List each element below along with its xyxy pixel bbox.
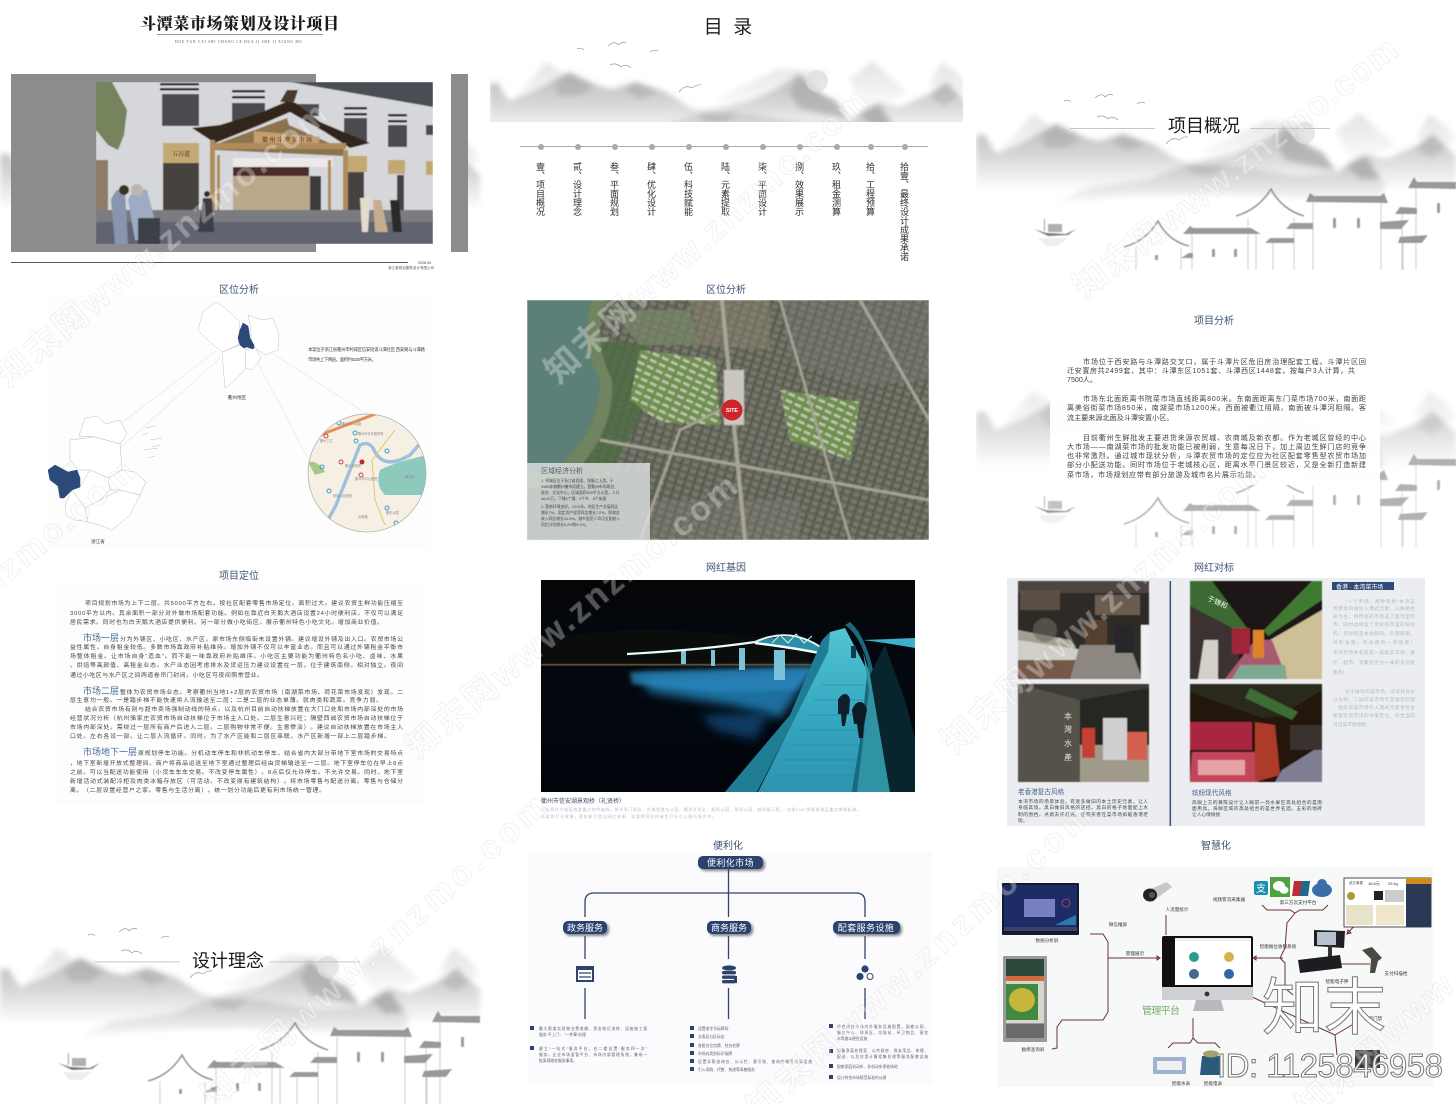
heading: 网红基因 [706,561,746,574]
positioning text: 市场地下一层 [83,746,137,757]
list: supporting facilities [829,1024,928,1080]
benchmark side text: 厅、超市、邻聚社区为一体的多功能 [1333,659,1415,666]
positioning text: ，地下室新增开放式整理间。商户将商品运送至地下室通过整理后经由货梯输送至一二层。地下室停车位在早上8点 [70,759,403,767]
device: electronic scale [1260,930,1349,985]
benchmark side text: 以为荣。二层的菜市场不宜做老旧但 [1333,696,1415,703]
positioning text: 益性属性。自身租金较低。多数市场靠政府补贴维持。增加外铺不仅可以丰富业态。而且可以通过外铺租金平衡市 [70,643,403,651]
benchmark side text: 的。见绿的卖本地蔬和。外国蔬果。 [1333,630,1415,637]
captions left: 街。 [1018,817,1027,824]
night bridge photo [541,580,915,792]
positioning text [70,599,403,794]
positioning text: 分为外铺区、小吃区、水产区。原市场东侧临街未设置外铺。建议增设外铺及出入口。农贸市场公 [120,635,403,643]
photo: hong kong market entrance: 本 [1064,711,1072,721]
icon: database [722,965,737,983]
photo: colorful butcher stall [1190,684,1322,782]
node: government services: 政务服务 [567,922,603,933]
positioning text: 经营状况分析（杭州骆家庄农贸市场自动扶梯位于市场主入口处。二层生意兴旺；隔壁西诚农贸市场自动扶梯位于 [70,714,403,722]
cover title: 斗潭菜市场策划及设计项目 [140,14,339,33]
cover footer: 浙江某规划建筑设计有限公司 [388,265,434,270]
network label and monitor: 管理展示 [1126,950,1145,957]
analysis text: 也非常激烈。通过城市现状分析，斗潭农贸市场的定位应为社区配套零售型农贸市场加 [1067,451,1366,460]
certificates and stall info screen: 武江单菜 [1349,880,1364,885]
benchmark side text: 本湾市场并非就是一座集菜市场、餐 [1333,649,1415,656]
satellite image [527,300,929,540]
city map circle: 衢州三江 [320,438,334,443]
toc items: 捌、效果展示 [794,161,804,216]
positioning text: 新增活动式装配冷柜及肉类冰箱存放区（可活动。不改变原有建筑结构）。将市场零售与配送分离。零售与仓储分 [70,777,403,785]
ink mountains [490,42,963,122]
analysis text: 大市场——南湖菜市场的批发功能已被削弱，生意每况日下，加上周边生鲜门店的竞争 [1067,442,1366,451]
network label and monitor: 微信推屏 [1109,921,1128,928]
analysis text: 部分小配送功能。同时市场位于老城核心区，距离水亭门景区较近，又是全新打造新建 [1067,460,1366,469]
list: government services: 服务“不上门”、“一件事”办理 [539,1032,586,1037]
heading: 项目定位 [219,569,259,582]
positioning text: 场整体租金。让市场自身“造血”。而不能一味靠政府补贴维序。小吃区主要功能为衢州特色名小吃、卤味、水果 [70,652,403,660]
photo: hong kong market entrance: 產 [1064,752,1072,762]
icon: settings panel [576,966,594,982]
project analysis panel [976,314,1456,547]
icon: hexagons [856,965,873,980]
city map circle: 衢江区 [405,474,415,479]
connector lines [1052,905,1370,1055]
Quzhou label: 衢州地区 [228,394,247,401]
table of contents slide [489,17,969,262]
device: barcode scanner: 支付扫描枪 [1385,970,1408,977]
positioning text: 市场二层 [83,685,119,696]
toc items: 柒、平面设计 [757,161,767,217]
rendering of market entrance: 五谷道 [172,150,190,158]
payment platform logos [1213,877,1332,906]
city map circle: 大桥路 [358,514,368,519]
photo: hong kong market entrance [1018,684,1149,782]
device: camera [1143,882,1189,913]
device: data screen: 数据分析屏 [1036,937,1059,944]
section title: 项目概况 [1168,116,1240,136]
toc title: 目 录 [704,17,752,38]
smart meters [1153,1050,1223,1087]
benchmark side text: “一个市场。两种风格”本湾菜 [1345,598,1415,605]
list: business services: 各租台位包牌、柱台宅牌 [698,1043,740,1048]
section slide: project overview [976,94,1456,270]
captions left: 风眼上方的黄陈设计让人眼前一亮水果区高处组合的是雨 [1192,799,1322,806]
regional economy overlay: 46.49万。下辖2个镇、9个乡、8个街道 [541,496,606,501]
device: data screen [1002,883,1079,944]
toc items: 拾、工程预算 [865,161,875,217]
positioning text: 结合农贸市场有别与超市卖场强制动线的特点。以及杭州目前自动扶梯放置在大门口处和市场内部深处的市场 [85,705,403,713]
list: supporting facilities: 配备净菜处理室、公共厨房、保安用品、修理、 [837,1048,928,1053]
regional economy overlay: 1. 柯城区位于浙江省西部。钱塘江上游。于 [541,478,614,483]
captions left: 身临其境。黑白做旧风格的店招。黑白的格子地面配上木 [1018,804,1148,811]
positioning text: 居民需求。同时也为白天鹅大酒店提供便利。另一部分做小吃街区。展示衢州特色小吃文化。增加商业价值。 [70,618,383,626]
toc items: 玖、租金测算 [831,161,841,217]
benchmark side badge: 香港 · 本湾菜市场 [1336,583,1383,591]
city map circle: 柯城人民医院 [333,493,353,498]
heading: 便利化 [713,839,743,852]
list: supporting facilities: 配送、以及应用计算程集处理等服务配套设施 [837,1054,928,1059]
benchmark side badge [1332,582,1394,591]
site marker [722,400,742,420]
list: business services: 设置老字号标牌间 [698,1026,729,1031]
benchmark side text: 日料食物。鸡食辣的一点随便！ [1333,639,1415,646]
cover slide [0,14,480,270]
captions left: 制的围挡。点缀去许灯光。使购买者在菜市场如临香港老 [1018,811,1148,818]
smart meters: 智能水表 [1172,1080,1191,1087]
captions left: 让人心情愉悦 [1192,811,1220,818]
list: government services: 最大限度实现物业费收缴、资金账位流转、设施施工报 [539,1026,647,1031]
tree connectors [585,868,865,1019]
city map circle: 衢州市中心医院 [355,476,378,481]
captions left: 老香港复古风格 [1018,787,1065,796]
list: supporting facilities: 设计符合市场规范标准的公厕 [837,1075,887,1080]
node: supporting facilities [833,921,900,934]
root node [698,856,763,869]
location description: 市场共上下两层。面积约5100平方米。 [308,356,376,363]
node: business services: 商务服务 [711,922,747,933]
photo caption: 衢州市信安湖景观桥（礼贤桥） [541,797,625,805]
benchmark side text: 市。同时也保留了传统的市里的喧闹 [1333,621,1415,628]
toc items: 贰、设计理念 [572,161,582,216]
benchmark side text: 对于破败的菜市场。非常抗日乐 [1345,688,1415,695]
list: government services: 服务。企业市场监管平台、市场内部管理系统。集成一 [539,1052,647,1057]
photo: hong kong market entrance: 水 [1064,738,1072,747]
cover footer [11,261,434,270]
list: business services: 引入采购、代售、快递等高善服务 [698,1067,755,1072]
photo caption: 同以桥作为城区旅游重点的中轴线。将水亭门街区、古城墙遗址公园、儒学文化区、鹿鸣公园、草坪公园、城市展示馆、“北部208”等新老城区重点串联起来。 [541,806,861,812]
photo: old Hong Kong interior [1018,581,1149,679]
list: business services: 设置导购咨询台、公示栏、意引致、查询终端等引导设施 [698,1059,812,1064]
list: supporting facilities: 综合疏控市场内外服务设施配置。配套公测、 [837,1024,928,1029]
positioning text: 通过小吃区与水产区之间两道卷帘门封闭。小吃区可夜间照常营业。 [70,671,263,679]
site marker: SITE [726,408,738,414]
satellite map panel [527,283,929,540]
list: government services: 批离规政务服务事项。 [539,1058,577,1063]
list: supporting facilities: 服务中心、休息区、垃圾站、环卫物品、直饮 [837,1030,928,1035]
diagonal site watermarks: 知末网www.znzmo.com [538,82,875,391]
internet-famous benchmark panel [1007,561,1425,826]
regional economy overlay: 2. 营商环境良好。2019年。地区生产总值同比 [541,504,618,509]
regional economy overlay: 经济、文化中心。区域面积609平方公里。人口 [541,490,620,495]
rendering of market entrance [96,82,433,244]
analysis text: 市场东北面距离书院菜市场直线距离800米。东南面距离东门菜市场700米，南面距 [1083,394,1366,403]
heading: 区位分析 [219,283,259,296]
positioning text: 原规划停车功能。分机动车停车和非机动车停车。结合省内大部分带地下室市场的交易特点 [138,749,403,757]
network label and monitor [1109,921,1383,1068]
location description: 本案位于浙江省衢州市柯城区信安街道斗潭社区 西安路与斗潭路 [308,346,426,353]
regional economy overlay: 收入同比增长34.9%。城乡居民人均可支配收入 [541,516,620,521]
management platform computer [1142,936,1253,1017]
heading: 项目分析 [1194,314,1234,327]
device: electronic scale: 智能摊位收银系统 [1260,943,1297,950]
positioning text: 离。（二层设置经营户之家。零售与生活分离）。统一划分功能后更有利市场统一管理。 [70,786,325,794]
analysis text: 目前衢州生鲜批发主要进货来源农贸城、农商城及新农都。作为老城区曾经的中心 [1083,433,1366,442]
positioning text: 3000平方以内。其余面积一部分对外做市场配套功能。例如在靠近白天鹅大酒店设置24小时便利店。不仅可以满足 [70,609,403,617]
benchmark side text: 彩为主。将传统的市场成了超市型的 [1333,613,1415,620]
positioning text: 层生意均一般。一是踏步梯不能快速将人流输送至二层；二是二层的业态单薄。就肉类和蔬菜。竞争力弱。 [70,696,382,704]
city map circle: 衢州市政府 [345,463,362,468]
captions left: 面用具。海鲜区域的高处组合的是世界名酒。五彩的地砖 [1192,805,1322,812]
benchmark side text: 集市！ [1333,669,1347,676]
list: government services: 建立“一站式”服务平台。在二楼设置“服务四一次” [539,1046,648,1051]
benchmark side text: 场整体风格加入港式元素。以鲜艳色 [1333,605,1415,612]
convenience panel [527,839,932,1085]
list: government services [530,1026,648,1063]
divider [1170,581,1171,826]
analysis text: 离美俗街菜市场850米，南湖菜市场1200米。西面被衢江阻隔，南面被斗潭河阻隔。客 [1067,403,1366,412]
smart management panel [997,839,1433,1087]
analysis text: 7500人。 [1067,376,1097,384]
photo: modern market aisle: 于锦和 [1206,594,1229,611]
rendering of market entrance: 衢州斗潭菜市场 [262,136,312,144]
regional economy overlay: 区域经济分析 [541,466,583,475]
cover title underline and pinyin: DOU TAN CAI SHI CHANG CE HUA JI SHE JI XIANG MU [175,40,302,44]
list: business services: 文表区分区标志 [698,1034,725,1039]
positioning text: 市场一层 [83,632,119,643]
network label and monitor: 智能门禁 [1364,1015,1383,1022]
brand watermark: 知末 [1262,974,1386,1043]
analysis text: 市场位于西安路与斗潭路交叉口，属于斗潭片区危旧房治理配套工程。斗潭片区回 [1083,357,1366,366]
city map circle: 衢州市人民路 [342,421,362,426]
internet-famous gene panel [541,561,915,819]
toc items: 陆、元素提取 [720,161,730,217]
payment platform logos: 第三方云支付平台 [1280,899,1317,906]
toc items: 肆、优化设计 [646,161,656,217]
analysis text: 迁安置房共2499套，其中：斗潭东区1051套、斗潭西区1448套，按每户3人计算，共 [1067,366,1355,375]
toc items [535,161,909,262]
toc items: 叁、平面规划 [609,161,619,216]
gray image placeholders [11,74,468,252]
heading: 网红对标 [1194,561,1234,574]
positioning text: 项目规划市场为上下二层。共5000平方左右。按社区配套零售市场定位。面积过大。建议农贸生鲜功能压缩至 [85,599,403,607]
positioning text: 市场内部深处。需绕过一层所有商户后进入二层。二层购物非常不便。生意惨淡）。建议自动扶梯放置在市场主入 [70,723,403,731]
device: touch kiosk: 触摸查询屏 [1022,1046,1045,1053]
smart meters: 智能电表 [1204,1080,1223,1087]
captions left: 本湾市场的场景体验。有逐多做旧的本土历史元素。让人 [1018,798,1148,805]
heading: 智慧化 [1201,839,1231,852]
positioning text: 之前。可以当配送功能使用（小货车车车交易。不改变停车属性）。8点后仅允许停车。不允许交易。同时。地下室 [70,768,403,776]
benchmark side text: 、拙劣的菜市场引入港式元素更符合 [1333,704,1415,711]
captions right: 缤纷现代风格 [1192,788,1232,797]
node: business services [707,921,751,934]
root node: 便利化市场 [707,857,754,868]
project positioning panel [55,569,425,805]
positioning text: 、烘焙等高颜值、高租金业态。水产业态因考虑排水及货运压力建议设置在一层。位于建筑南侧。相对独立。夜间 [70,661,403,669]
payment platform logos: 支 [1256,883,1266,895]
device: touch kiosk [1003,956,1047,1053]
Quzhou map [198,302,279,388]
node: government services [563,921,607,934]
diagonal site watermarks: 知末网www.znzmo.com [399,467,745,766]
benchmark side text [1333,598,1415,728]
list: business services [690,1026,812,1072]
timeline [520,144,928,150]
captions left [1018,787,1322,824]
regional economy overlay [527,463,650,540]
certificates and stall info screen: 25 kg [1388,881,1398,886]
toc items: 拾壹、最终设计成果承诺 [899,161,909,262]
list: business services: 市场内类别标识指牌 [698,1051,732,1056]
city map circle: 衢东公园 [386,510,399,515]
regional economy overlay: 1985年随衢州撤市而建立。是衢州市的政治、 [541,484,618,489]
connector lines [60,350,367,480]
benchmark side text: 新型农贸市场的效果定位。符合当前 [1333,712,1415,719]
location description [308,346,426,363]
city map circle [305,410,430,535]
node: supporting facilities: 配套服务设施 [838,922,894,933]
city map circle: 衢州市青年路学院 [358,431,384,436]
positioning text: 口处。左右各设一部。让二层人流循环。同时。为了水产区能和二层区串联。水产区新增一部上二层踏步梯。 [70,732,390,740]
diagonal site watermarks: 知末网www.znzmo.com [1067,30,1405,306]
positioning text: 整体为农贸市场业态。考察衢州当地1+2层的农贸市场（南湖菜市场、荷花菜市场发现）发现。二 [120,688,403,696]
list: supporting facilities: 水等基本便民设施 [837,1036,868,1041]
certificates and stall info screen [1344,878,1431,927]
cover footer: 2026.04 [418,261,431,265]
Zhejiang map [48,416,162,530]
analysis text: 流主要来源北面及斗潭安置小区。 [1067,413,1173,422]
section slide: design concept [0,928,480,1104]
photo caption: 炫彩的灯光效果。更妆彰打造出网红效果。本案将网红桥者色灯光引入副市场文中。 [541,813,716,819]
photo caption [541,797,861,819]
toc items: 壹、项目概况 [535,161,545,217]
Zhejiang label: 浙江省 [91,538,105,545]
diagonal site watermarks: 知末网www.znzmo.com [935,452,1272,761]
certificates and stall info screen: 18.8元 [1368,881,1380,886]
device: camera: 人流量统计 [1166,906,1189,913]
brand watermark [1217,974,1443,1084]
heading: 区位分析 [706,283,746,296]
list: supporting facilities: 配套家庭机动车、非机动车停放场地 [837,1064,898,1069]
photo: modern market aisle [1190,581,1322,679]
regional economy overlay: 同比分别增长8.2%和9.1%。 [541,522,589,527]
analysis text [1067,357,1366,479]
section title: 设计理念 [192,950,264,971]
photo: hong kong market entrance: 灣 [1064,724,1072,734]
reference id: ID: 1125846958 [1217,1047,1443,1084]
payment platform logos: 视频客流采集器 [1213,896,1245,903]
device: barcode scanner [1362,947,1408,977]
device: electronic scale: 智能电子秤 [1326,978,1349,985]
location analysis panel [48,283,430,548]
management platform computer: 管理平台 [1142,1004,1180,1017]
benchmark side text: 对当菜市场规模。 [1333,721,1371,728]
regional economy overlay: 增长7%。固定资产投资同比增长7.2%。财政总 [541,510,620,515]
toc items: 伍、科技赋能 [683,162,693,217]
analysis text: 菜市场，市场规划应带有部分旅游及城市名片展示功能。 [1067,470,1260,479]
